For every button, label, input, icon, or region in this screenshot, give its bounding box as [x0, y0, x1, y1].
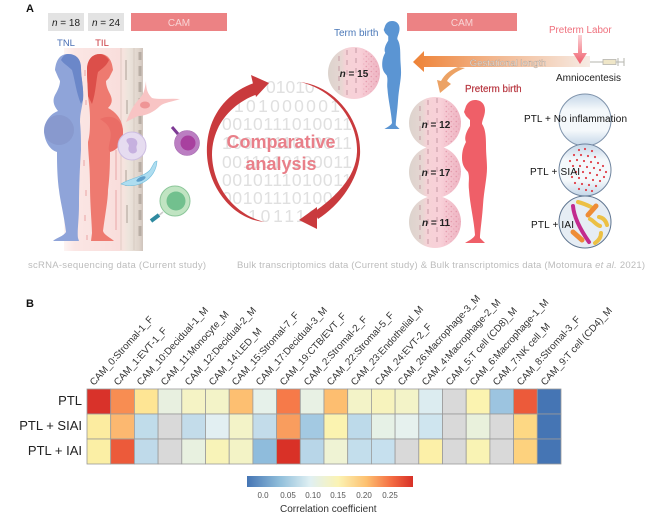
circular arrow right [299, 82, 360, 229]
row labels: PTL + IAI [28, 443, 82, 458]
sample size box n = 24 [88, 13, 124, 31]
TNL pregnant figure, blue [44, 54, 83, 241]
CAM box right [407, 13, 517, 31]
sample size box n = 18: n = 18 [52, 18, 80, 29]
circle: SIAI with red dots [559, 144, 611, 196]
tissue circle n = 15: n = 15 [340, 69, 369, 80]
column labels: CAM_5:T cell (CD8)_M [444, 306, 520, 388]
circle: no inflammation [559, 94, 611, 146]
panel A: study design [26, 3, 645, 271]
label: PTL + No inflammation: PTL + No inflammation [524, 114, 627, 125]
CAM box left [131, 13, 227, 31]
column labels: CAM_14:LED_M [207, 326, 264, 388]
label: PTL + IAI: PTL + IAI [531, 220, 574, 231]
icon: purple cell with antibody [172, 127, 200, 156]
bulk transcriptomics caption: Bulk transcriptomics data (Current study) & Bulk transcriptomics data (Motomura et al. 2021) [237, 260, 645, 271]
preterm labor down arrow [573, 35, 587, 64]
comparative analysis heading: Comparative [226, 132, 336, 152]
panel label A: A [26, 3, 34, 15]
column labels: CAM_19:CTB/EVT_F [278, 311, 349, 388]
comparative analysis heading [226, 132, 336, 174]
column labels: CAM_7:NK cell_M [491, 321, 553, 388]
column labels: CAM_2:Stromal-2_F [302, 314, 370, 388]
TNL label: TNL [57, 38, 75, 49]
tissue background [64, 48, 143, 251]
icon: green cell with antibody [151, 186, 190, 221]
TIL label: TIL [95, 38, 109, 49]
tissue circle n = 11: n = 11 [422, 218, 450, 229]
column labels: CAM_12:Decidual-2_M [183, 305, 259, 388]
binary data background: 0010111010011 [222, 114, 352, 134]
row labels [19, 393, 82, 458]
binary data background: 1001011010011 [222, 133, 352, 153]
column labels: CAM_17:Decidual-3_M [254, 305, 330, 388]
preterm birth label: Preterm birth [465, 84, 522, 95]
colour bar legend: 0.15 [330, 491, 346, 500]
label: PTL + SIAI: PTL + SIAI [530, 167, 580, 178]
icon: fibroblast [126, 81, 180, 122]
circle: IAI with bacteria [559, 196, 611, 248]
colour bar legend [247, 476, 413, 515]
TIL pregnant figure, red [87, 54, 123, 241]
tissue circle n = 17 [409, 146, 461, 198]
panel label B: B [26, 298, 34, 310]
column labels: CAM_24:EVT-2_F [373, 322, 434, 388]
binary data background: 0010111010011 [222, 170, 352, 190]
term birth label: Term birth [334, 28, 378, 39]
colour bar legend: Correlation coefficient [280, 504, 377, 515]
preterm labor label: Preterm Labor [549, 25, 612, 36]
scRNA caption: scRNA-sequencing data (Current study) [28, 260, 206, 271]
binary data background: 01010000010 [222, 96, 352, 116]
binary data background: 0011010100011 [222, 152, 352, 172]
column labels: CAM_8:Stromal-3_F [515, 314, 583, 388]
binary data background: 01010 [266, 77, 315, 97]
heatmap grid [87, 389, 561, 464]
tissue circle n = 17: n = 17 [422, 168, 451, 179]
preterm branch arrow [437, 67, 465, 93]
colour bar legend: 0.05 [280, 491, 296, 500]
preterm birth silhouette, red [462, 100, 487, 243]
binary data background [222, 77, 352, 226]
column labels: CAM_6:Macrophage-1_M [468, 297, 551, 388]
column labels: CAM_0:Stromal-1_F [88, 314, 156, 388]
column labels: CAM_10:Decidual-1_M [135, 305, 211, 388]
column labels: CAM_4:Macrophage-2_M [420, 297, 503, 388]
gestational length arrow: Gestational length [470, 58, 546, 69]
binary data background: 101110 [248, 206, 318, 226]
CAM box left: CAM [168, 18, 190, 29]
tissue circle n = 12: n = 12 [422, 120, 451, 131]
column labels: CAM_22:Stromal-5_F [325, 310, 397, 388]
panel B: correlation heatmap [19, 293, 615, 515]
tissue circle n = 12 [409, 97, 461, 149]
sample size box n = 24: n = 24 [92, 18, 120, 29]
circular arrow left [207, 75, 269, 222]
colour bar legend: 0.25 [382, 491, 398, 500]
colour bar legend: 0.10 [305, 491, 321, 500]
colour bar legend: 0.20 [356, 491, 372, 500]
CAM box right: CAM [451, 18, 473, 29]
icon: blue crescent cell [121, 161, 157, 186]
column labels: CAM_11:Monocyte_M [159, 309, 232, 388]
comparative analysis heading: analysis [245, 154, 317, 174]
column labels: CAM_15:Stromal-7_F [230, 310, 302, 388]
sample size box n = 18 [48, 13, 84, 31]
tissue circle n = 11 [409, 196, 461, 248]
tissue circle n = 15 [328, 47, 380, 99]
row labels: PTL [58, 393, 82, 408]
gestational length arrow [413, 51, 590, 72]
icon: monocyte [118, 132, 146, 160]
icon: syringe [590, 58, 624, 66]
column labels: CAM_23:Endothelial_M [349, 304, 426, 388]
row labels: PTL + SIAI [19, 418, 82, 433]
colour bar legend: 0.0 [257, 491, 269, 500]
amniocentesis label: Amniocentesis [556, 73, 621, 84]
column labels: CAM_1:EVT-1_F [112, 326, 170, 388]
column labels [88, 293, 615, 388]
column labels: CAM_9:T cell (CD4)_M [539, 306, 615, 388]
binary data background: 0010111010011 [222, 188, 352, 208]
term birth silhouette, blue [382, 21, 401, 129]
column labels: CAM_26:Macrophage-3_M [396, 293, 483, 388]
